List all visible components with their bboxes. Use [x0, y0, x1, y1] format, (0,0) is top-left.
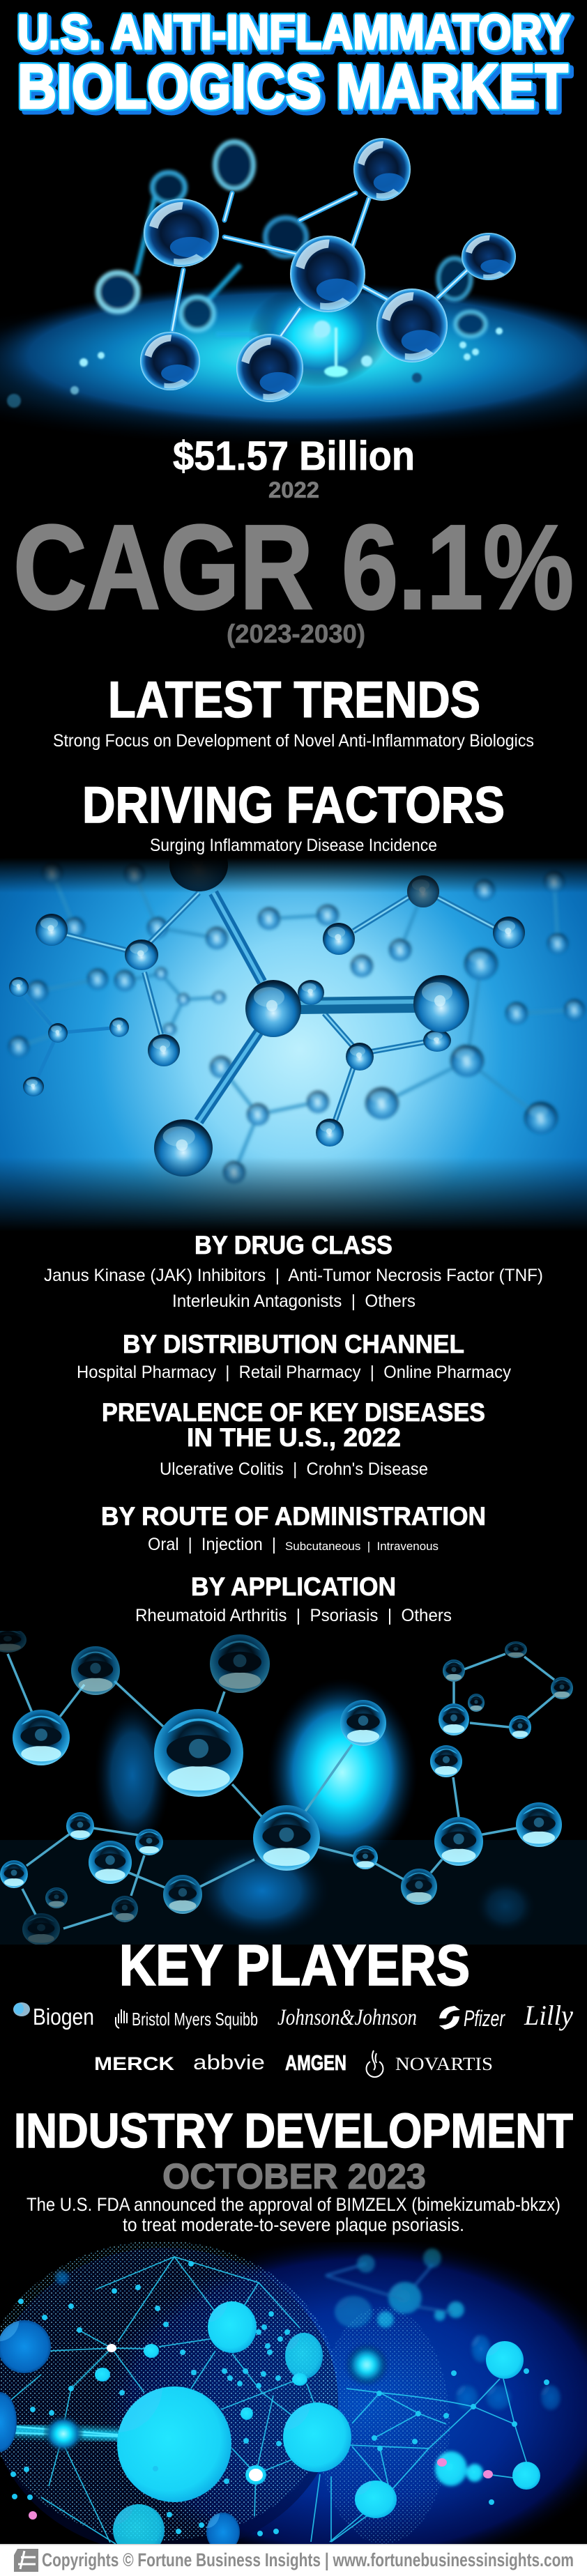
logo: Novartis [367, 2050, 493, 2077]
segment: by distribution channel: BY DISTRIBUTION CHANNEL [123, 1330, 464, 1358]
cyan spheres [0, 2301, 540, 2556]
logo: Merck: MERCK [94, 2053, 175, 2074]
segment: by route of administration: Oral | Injection | [148, 1535, 276, 1554]
hero image: glass molecule on glowing floor [0, 138, 587, 446]
network molecule image [0, 2242, 587, 2544]
bonds [8, 1654, 554, 1929]
segment: by application: Rheumatoid Arthritis | Psoriasis | Others [135, 1606, 452, 1625]
blurred background molecules [8, 862, 585, 1183]
segment: by application: BY APPLICATION [191, 1572, 396, 1601]
logo: Bristol Myers Squibb [116, 2009, 258, 2030]
development text: to treat moderate-to-severe plaque psoriasis. [123, 2214, 464, 2235]
segment: by drug class: Janus Kinase (JAK) Inhibitors | Anti-Tumor Necrosis Factor (TNF) [44, 1266, 543, 1285]
heading: driving factors: DRIVING FACTORS [82, 777, 505, 834]
bonds [172, 193, 468, 342]
small cyan dots [13, 2264, 547, 2533]
foreground bonds [19, 893, 494, 1121]
forecast period: (2023-2030) [227, 620, 365, 648]
segment: by distribution channel [77, 1330, 511, 1382]
logo: Johnson and Johnson: Johnson&Johnson [277, 2005, 417, 2030]
glass molecule image with cyan glow [0, 1627, 587, 1945]
footer logo [14, 2549, 38, 2572]
logo: Novartis: NOVARTIS [395, 2054, 493, 2074]
segment: by route of administration [101, 1502, 486, 1554]
pink nodes [29, 2458, 493, 2520]
segment: by drug class: BY DRUG CLASS [195, 1231, 392, 1259]
logo: Biogen: Biogen [33, 2004, 94, 2030]
logo: Amgen: AMGEN [285, 2050, 346, 2075]
beam [0, 2429, 150, 2437]
heading: key players: KEY PLAYERS [119, 1933, 470, 1998]
segment: by route of administration: BY ROUTE OF ADMINISTRATION [101, 1502, 486, 1531]
blue molecule image [0, 838, 587, 1232]
segment: prevalence of key diseases: Ulcerative Colitis | Crohn's Disease [160, 1459, 428, 1479]
glass spheres [140, 138, 516, 402]
network lines [11, 2257, 526, 2544]
driving factors text: Surging Inflammatory Disease Incidence [150, 836, 437, 855]
segment: by distribution channel: Hospital Pharmacy | Retail Pharmacy | Online Pharmacy [77, 1363, 511, 1382]
logo: Pfizer [439, 2006, 505, 2031]
foreground spheres [9, 838, 525, 1176]
segment: prevalence of key diseases [102, 1398, 485, 1479]
development text [26, 2194, 561, 2235]
logo: AbbVie: abbvie [193, 2051, 265, 2074]
development date: OCTOBER 2023 [162, 2156, 426, 2196]
glass spheres [0, 1627, 573, 1945]
segment: prevalence of key diseases: PREVALENCE OF KEY DISEASES [102, 1398, 485, 1427]
latest trends text: Strong Focus on Development of Novel Anti-Inflammatory Biologics [53, 731, 534, 751]
blurred right molecules [55, 2248, 561, 2486]
logo: Pfizer: Pfizer [464, 2006, 505, 2031]
footer bar [0, 2544, 587, 2576]
segment: by application [135, 1572, 452, 1625]
base year: 2022 [268, 477, 319, 503]
segment: by drug class: Interleukin Antagonists | Others [172, 1291, 416, 1311]
title [17, 5, 572, 125]
segment: by route of administration: Subcutaneous | Intravenous [285, 1540, 439, 1553]
segment: prevalence of key diseases: IN THE U.S., 2022 [187, 1423, 401, 1452]
market size value: $51.57 Billion [173, 434, 415, 479]
heading: latest trends: LATEST TRENDS [108, 672, 480, 728]
logo: Biogen [13, 2002, 94, 2030]
segment: by drug class [44, 1231, 543, 1311]
logo: Bristol Myers Squibb: Bristol Myers Squibb [132, 2009, 258, 2030]
logo: Lilly: Lilly [524, 2000, 573, 2031]
